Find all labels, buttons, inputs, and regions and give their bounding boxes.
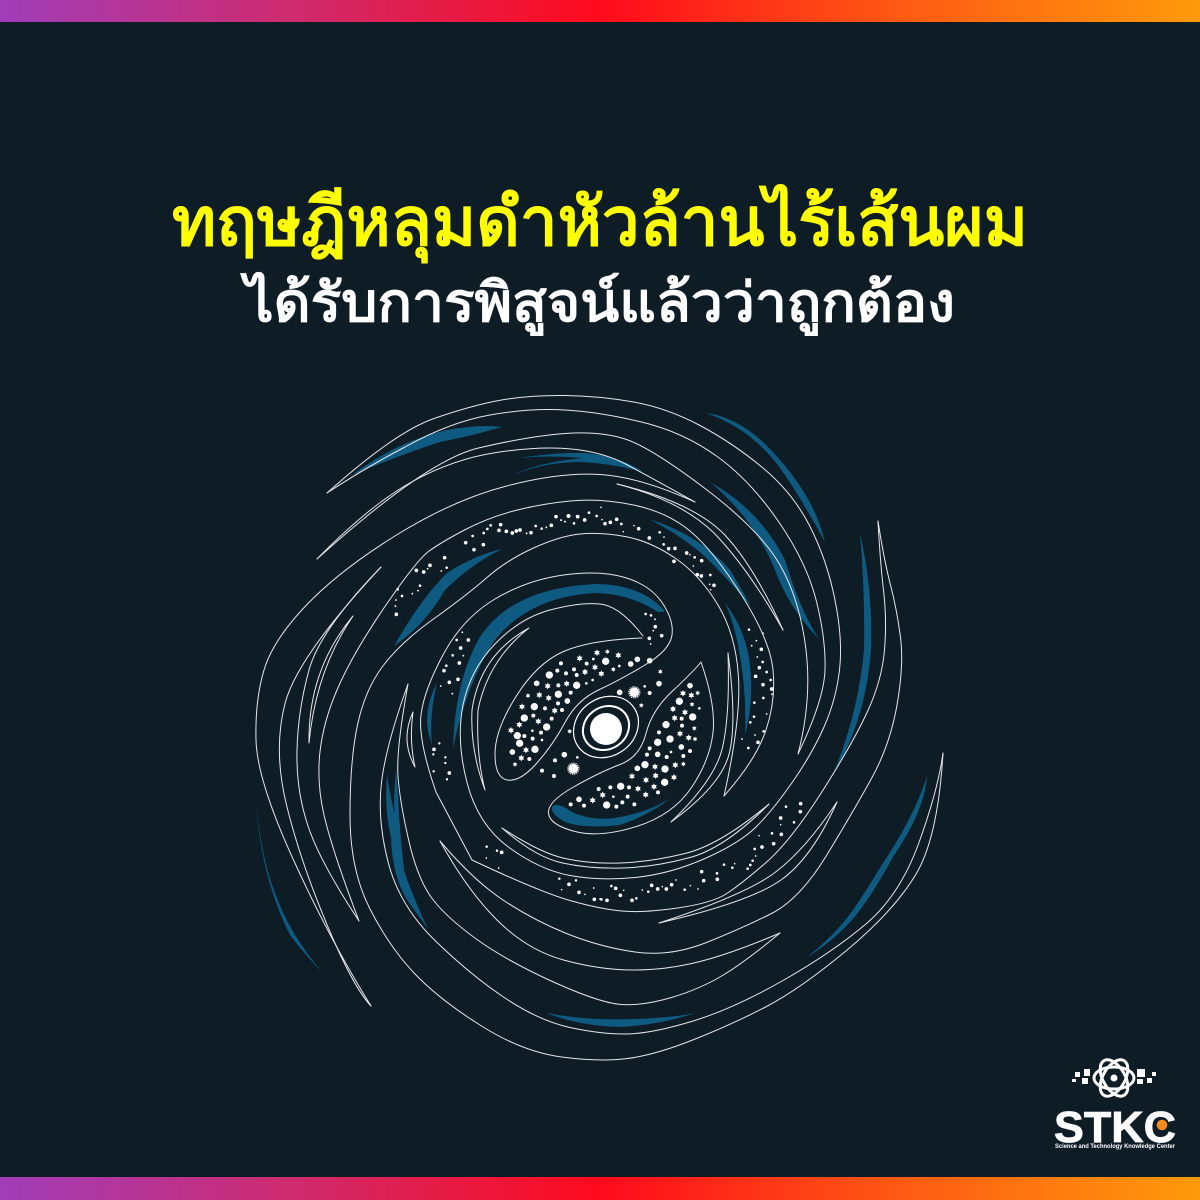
dust band: left arm <box>433 743 449 779</box>
title: yellow headline: ทฤษฎีหลุมดำหัวล้านไร้เส้นผม <box>172 183 1028 264</box>
spiral contour lines <box>256 395 943 1060</box>
core: white disc and rings <box>562 684 650 770</box>
subtitle: white headline: ได้รับการพิสูจน์แล้วว่าถูกต้อง <box>240 271 955 336</box>
blue streaks <box>256 413 927 1027</box>
star clusters in the inner lobes <box>508 649 700 807</box>
dust band: upper right <box>561 507 714 590</box>
illustration: spiral galaxy black hole <box>256 395 943 1060</box>
bottom gradient bar <box>0 1177 1200 1200</box>
icon: atom <box>1094 1055 1134 1101</box>
dust band: lower middle <box>601 864 735 900</box>
dust band: hook and right arm <box>646 614 772 748</box>
top gradient bar <box>0 0 1200 22</box>
logo: STKC <box>1054 1055 1176 1152</box>
logo orange dot <box>1157 1120 1167 1130</box>
dust band: upper left <box>395 513 596 694</box>
dust band: lower left <box>486 847 600 899</box>
logo wordmark: STKC <box>1054 1103 1176 1152</box>
logo tagline: Science and Technology Knowledge Center <box>1055 1143 1176 1150</box>
dust band: lower right <box>748 804 801 869</box>
icon: pixel squares <box>1072 1069 1156 1084</box>
